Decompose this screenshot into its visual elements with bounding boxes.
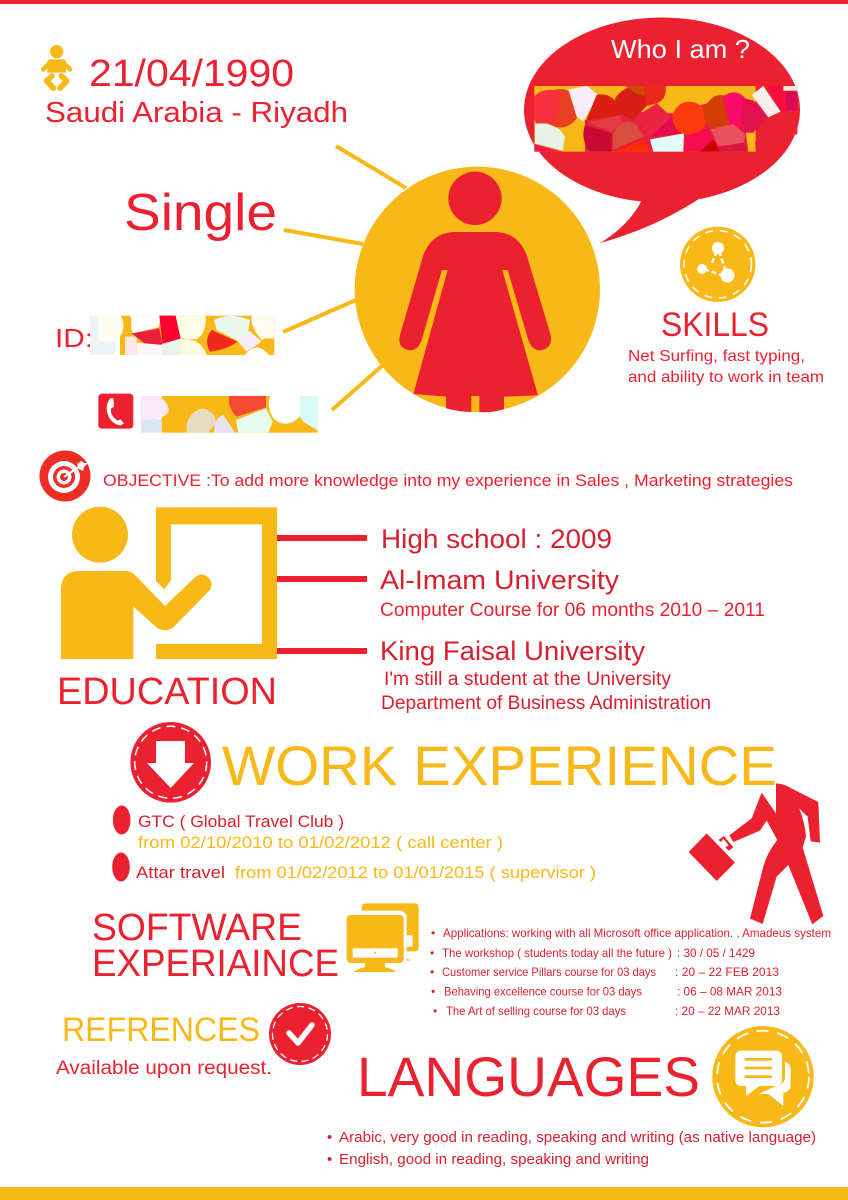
software and courses list: Customer service Pillars course for 03 days	[442, 965, 656, 979]
languages list	[327, 1129, 816, 1168]
icon: phone	[98, 394, 133, 429]
references heading: REFRENCES	[62, 1011, 260, 1049]
software and courses list: : 20 – 22 FEB 2013	[675, 965, 779, 979]
education text	[380, 524, 765, 714]
skills text	[628, 348, 824, 386]
software and courses list: •	[430, 965, 434, 979]
skills text: and ability to work in team	[628, 369, 824, 386]
education heading: EDUCATION	[57, 671, 277, 713]
education text: King Faisal University	[380, 636, 646, 666]
education text: Computer Course for 06 months 2010 – 2011	[380, 600, 765, 621]
software and courses list: •	[431, 984, 435, 998]
id number	[55, 316, 274, 355]
top bar	[0, 0, 848, 4]
icon: computer monitors	[347, 903, 419, 972]
software experience heading: SOFTWARE	[92, 907, 302, 949]
languages list: Arabic, very good in reading, speaking and writing (as native language)	[339, 1129, 816, 1146]
software and courses list: •	[431, 926, 435, 940]
work experience heading: WORK EXPERIENCE	[222, 734, 777, 797]
icon: chat bubbles	[712, 1026, 814, 1127]
objective text: OBJECTIVE :To add more knowledge into my experience in Sales , Marketing strategies	[103, 471, 793, 490]
bottom bar	[0, 1187, 848, 1200]
job: GTC: GTC ( Global Travel Club )	[138, 812, 344, 831]
blurred phone mosaic	[141, 396, 318, 433]
job: Attar travel: from 01/02/2012 to 01/01/2015 ( supervisor )	[235, 863, 596, 882]
job: Attar travel	[112, 852, 596, 882]
phone number	[98, 394, 318, 433]
id number: ID:	[55, 323, 93, 353]
software and courses list	[430, 926, 831, 1018]
skills text: Net Surfing, fast typing,	[628, 348, 805, 365]
references text: Available upon request.	[56, 1058, 272, 1079]
figure: walking man with briefcase	[689, 783, 823, 924]
languages list: •	[327, 1129, 332, 1146]
marital status: Single	[124, 184, 277, 242]
connector lines	[283, 146, 406, 410]
software and courses list: Behaving excellence course for 03 days	[444, 984, 642, 998]
job: GTC: from 02/10/2010 to 01/02/2012 ( call center )	[138, 833, 503, 852]
blurred mosaic strip	[534, 86, 797, 153]
software and courses list: The workshop ( students today all the future )	[442, 946, 672, 960]
languages list: •	[327, 1151, 332, 1168]
software and courses list: The Art of selling course for 03 days	[446, 1004, 626, 1018]
birth place: Saudi Arabia - Riyadh	[45, 97, 348, 129]
software and courses list: : 30 / 05 / 1429	[677, 946, 755, 960]
education text: Al-Imam University	[380, 565, 620, 595]
icon: teacher at board	[61, 507, 277, 659]
figure: woman in circle	[355, 167, 600, 412]
languages heading: LANGUAGES	[357, 1045, 700, 1108]
icon: target	[40, 450, 90, 502]
education connector lines	[277, 535, 367, 654]
skills icon	[680, 227, 755, 302]
software and courses list: : 20 – 22 MAR 2013	[675, 1004, 780, 1018]
languages list: English, good in reading, speaking and writing	[339, 1151, 649, 1168]
software and courses list: •	[430, 946, 434, 960]
speech bubble: who I am: Who I am ?	[611, 34, 750, 64]
icon: baby	[43, 45, 70, 88]
blurred id mosaic	[90, 316, 274, 355]
birth date: 21/04/1990	[89, 53, 294, 95]
skills heading: SKILLS	[661, 306, 769, 344]
software and courses list: •	[433, 1004, 437, 1018]
education text: Department of Business Administration	[381, 693, 711, 714]
software and courses list: : 06 – 08 MAR 2013	[677, 984, 782, 998]
speech bubble: who I am	[524, 18, 800, 243]
icon: down arrow	[130, 722, 211, 803]
software experience heading: EXPERIAINCE	[92, 943, 339, 985]
software and courses list: Applications: working with all Microsoft office application. , Amadeus system	[443, 926, 831, 940]
job: Attar travel: Attar travel	[136, 863, 225, 882]
education text: High school : 2009	[381, 524, 612, 554]
job: GTC	[113, 806, 503, 852]
icon: check mark	[269, 1003, 331, 1065]
software experience heading	[92, 907, 339, 985]
education text: I'm still a student at the University	[384, 669, 672, 690]
